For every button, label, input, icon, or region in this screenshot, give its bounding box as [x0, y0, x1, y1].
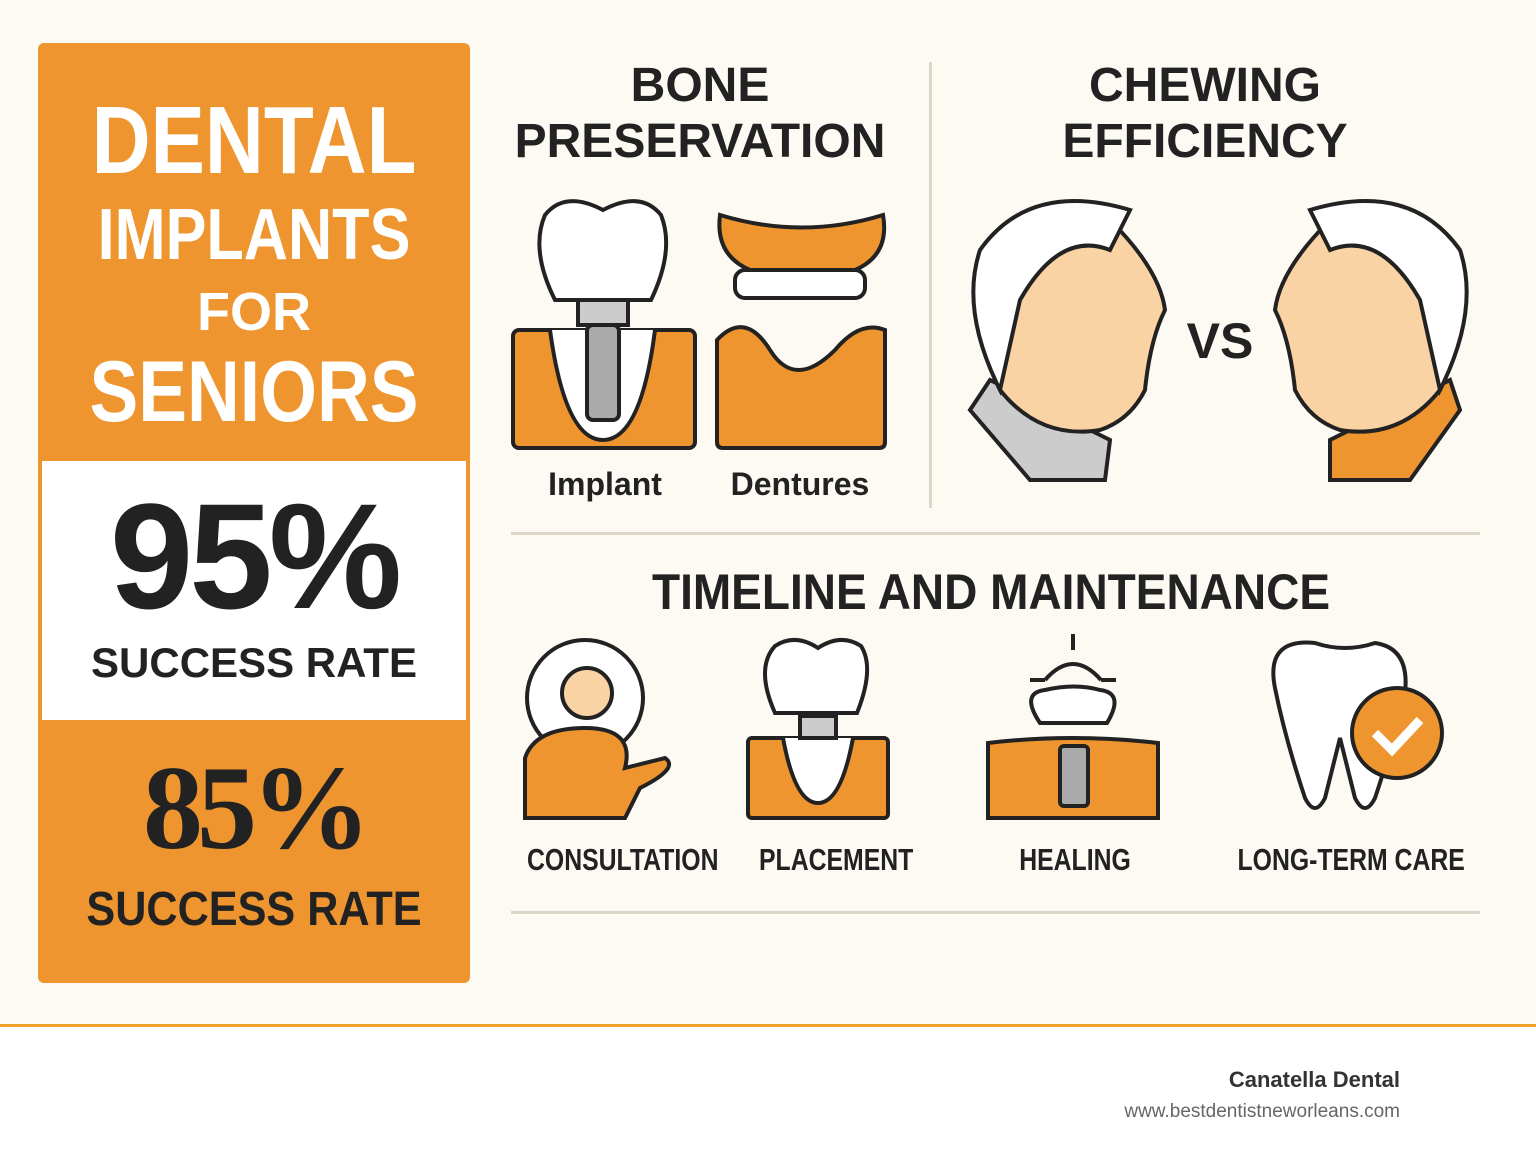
stat: 85%: SUCCESS RATE: [86, 883, 422, 936]
title: DENTAL: [92, 87, 416, 194]
title: IMPLANTS: [98, 195, 410, 275]
text: Dentures: [731, 466, 869, 502]
heading: chewing efficiency: EFFICIENCY: [1062, 115, 1348, 168]
heading: bone preservation: BONE: [631, 59, 769, 112]
heading: bone preservation: [515, 59, 885, 168]
text: PLACEMENT: [759, 842, 913, 877]
footer: [0, 1024, 1536, 1157]
text: LONG-TERM CARE: [1238, 842, 1465, 877]
heading: timeline and maintenance: TIMELINE AND MAINTENANCE: [652, 564, 1330, 620]
left panel: [38, 43, 470, 983]
labels: implant, dentures: Implant: [548, 466, 662, 502]
heading: chewing efficiency: CHEWING: [1089, 59, 1321, 112]
text: HEALING: [1019, 842, 1131, 877]
stat: 95%: SUCCESS RATE: [91, 639, 417, 686]
illustration: implant vs dentures: [511, 199, 887, 450]
heading: chewing efficiency: [1062, 59, 1348, 168]
stat: 95%: 95%: [110, 472, 398, 640]
stat: 85%: 85%: [143, 741, 365, 874]
illustration: seniors face to face: VS: [1187, 313, 1253, 369]
footer text: [1124, 1067, 1400, 1122]
heading: bone preservation: PRESERVATION: [515, 115, 885, 168]
footer text: Canatella Dental: [1229, 1067, 1400, 1092]
title: FOR: [197, 282, 311, 342]
title: [89, 87, 419, 440]
title: SENIORS: [89, 344, 419, 440]
step labels: CONSULTATION: [527, 842, 718, 877]
timeline icons: [523, 634, 1444, 820]
illustration: seniors face to face: [968, 199, 1469, 482]
stat: 85%: [86, 741, 422, 936]
footer text: www.bestdentistneworleans.com: [1124, 1101, 1400, 1122]
stat: 95%: [42, 461, 466, 720]
